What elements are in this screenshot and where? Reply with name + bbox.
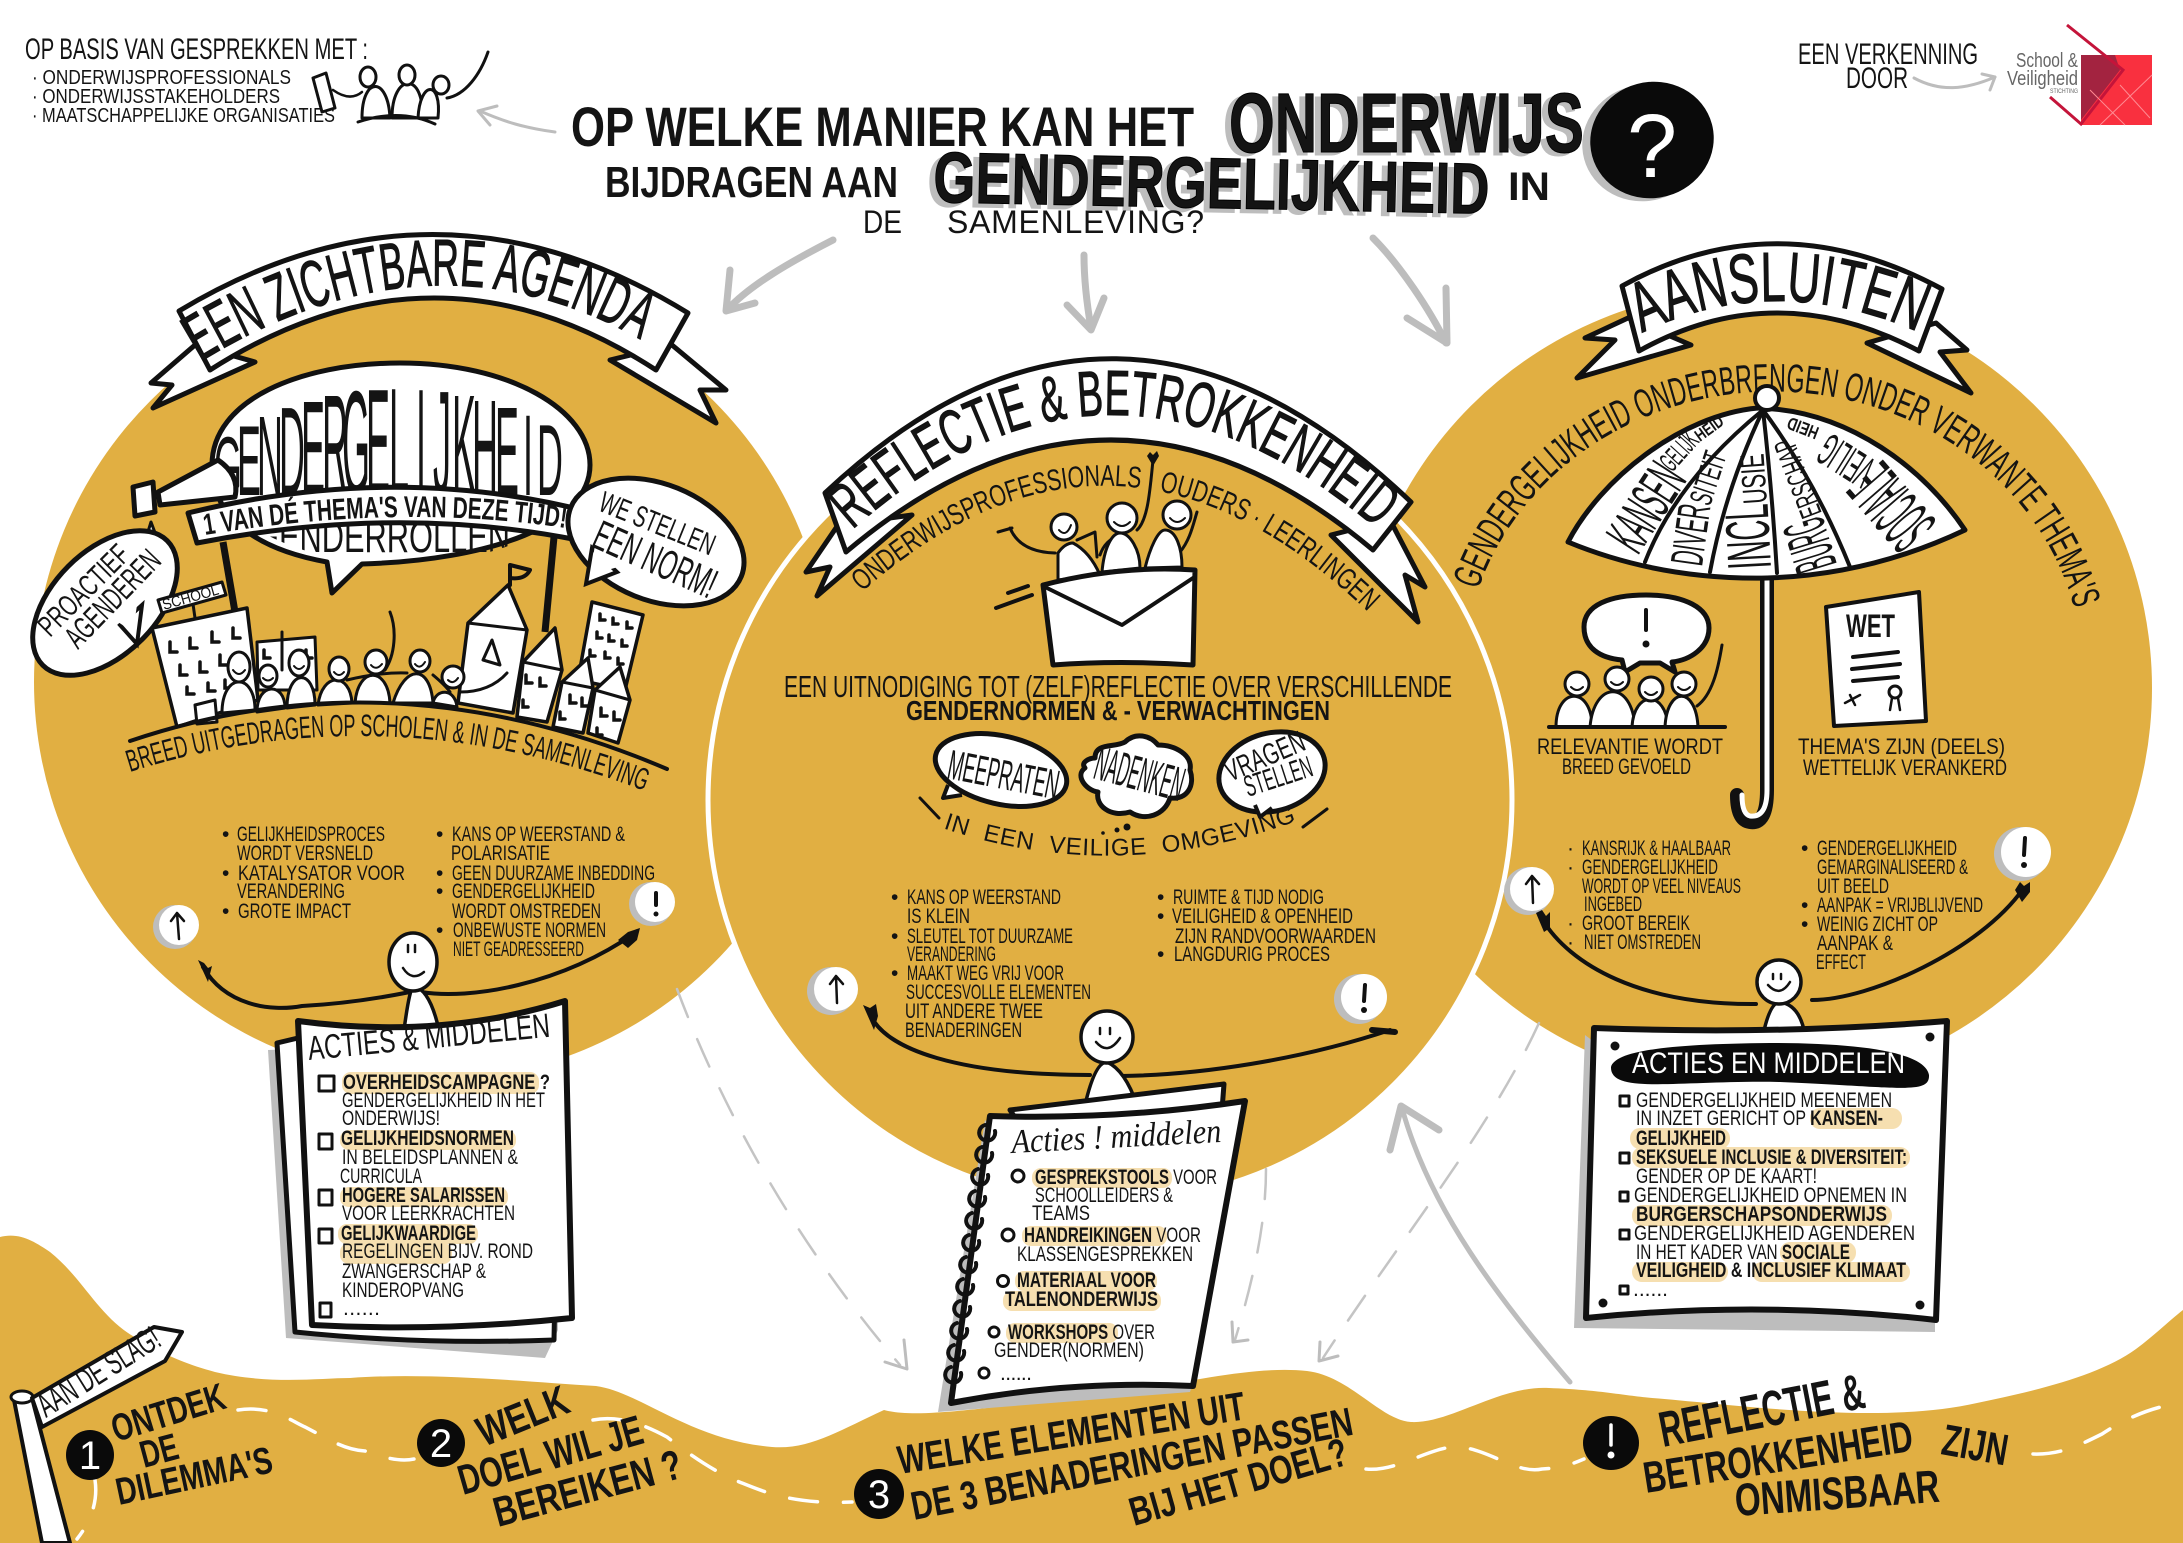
list: pros: • <box>891 886 898 909</box>
icon: umbrella with themes: INCL <box>1713 502 1785 571</box>
icon: up arrow circle <box>807 967 858 1015</box>
icon: question mark blob <box>1569 68 1727 215</box>
icon: up arrow circle <box>1504 867 1554 915</box>
curved heading: verwante thema's: GENDERGELIJKHEID ONDERBRENGEN ONDER VERWANTE THEMA'S <box>1454 364 2100 606</box>
list: cons: GENDERGELIJKHEID <box>452 880 595 903</box>
poster: acties en middelen: IN INZET GERICHT OP KANSEN- <box>1636 1107 1883 1130</box>
list: cons: ZIJN RANDVOORWAARDEN <box>1175 925 1376 948</box>
list: pros: KATALYSATOR VOOR <box>238 862 405 885</box>
figure: stick person holding notebook <box>863 1004 1395 1105</box>
list: pros <box>222 823 405 923</box>
poster: acties en middelen: GENDERGELIJKHEID AGENDEREN <box>1634 1222 1915 1245</box>
speech bubble: gendergelijkheid: I <box>416 359 426 528</box>
speech bubble: meepraten: MEEPRATEN <box>944 741 1063 808</box>
heading: een uitnodiging <box>784 669 1452 726</box>
step 1: ontdek de dilemma's: ONTDEK <box>106 1376 231 1451</box>
step 3: welke elementen: 3 <box>868 1473 890 1517</box>
heading: een uitnodiging: GENDERNORMEN & - VERWACHTINGEN <box>906 695 1330 726</box>
list: pros: GROTE IMPACT <box>238 900 351 923</box>
list: pros: GENDERGELIJKHEID <box>1582 856 1718 879</box>
dashed arrows from circles to the steps <box>677 989 1539 1369</box>
town: school, buildings, church, people <box>130 565 667 769</box>
speech bubble: gendergelijkheid: H <box>472 373 498 525</box>
logo: School & Veiligheid: STICHTING <box>2050 89 2078 95</box>
speech bubble: gendergelijkheid: N <box>257 393 283 519</box>
title: OP WELKE MANIER KAN HET <box>571 95 1194 158</box>
paper: acties en middelen: HOGERE SALARISSEN <box>342 1184 505 1207</box>
title: BIJDRAGEN AAN <box>605 158 898 207</box>
road: dashed white path along the steps <box>77 1403 2183 1539</box>
step 1: ontdek de dilemma's: 1 <box>79 1434 101 1478</box>
list: pros: UIT ANDERE TWEE <box>905 1000 1043 1023</box>
callout: reflectie en betrokkenheid onmisbaar <box>1583 1363 2012 1526</box>
speech bubble: gendergelijkheid: K <box>452 366 476 527</box>
list: cons: • <box>1801 913 1808 936</box>
step 2: welk doel wil je bereiken: 2 <box>430 1422 452 1466</box>
icon: umbrella with themes: ERSCHAP <box>1768 434 1829 522</box>
paper: acties en middelen: GELIJKWAARDIGE <box>341 1222 476 1245</box>
curved caption: breed uitgedragen: BREED UITGEDRAGEN OP SCHOLEN & IN DE SAMENLEVING <box>125 714 649 790</box>
icon: three people on a hill <box>313 52 488 124</box>
panel: reflectie en betrokkenheid contents <box>784 356 1452 1412</box>
icon: umbrella with themes: USIE <box>1734 453 1775 505</box>
poster: acties en middelen: GELIJKHEID <box>1636 1127 1726 1150</box>
cloud: nadenken: NADENKEN <box>1089 737 1190 812</box>
notebook: acties en middelen: GESPREKSTOOLS VOOR <box>1035 1166 1217 1189</box>
notebook: acties en middelen: WORKSHOPS OVER <box>1008 1321 1155 1344</box>
notebook: acties en middelen: MATERIAAL VOOR <box>1017 1269 1156 1292</box>
poster: acties en middelen: BURGERSCHAPSONDERWIJS <box>1636 1203 1887 1226</box>
speech bubble: gendergelijkheid: E <box>237 405 261 516</box>
intro text: op basis van gesprekken: OP BASIS VAN GESPREKKEN MET : <box>25 33 368 66</box>
list: cons: • <box>436 823 443 846</box>
icon: umbrella with themes: KANSEN <box>1594 451 1698 563</box>
list: pros: VERANDERING <box>237 880 345 903</box>
icon: umbrella with themes: HEID <box>1784 413 1821 443</box>
speech bubble: gendergelijkheid: I <box>523 392 533 521</box>
panel: een zichtbare agenda contents <box>10 232 747 1398</box>
step 3: welke elementen: WELKE ELEMENTEN UIT <box>895 1385 1248 1483</box>
list: pros: · <box>1567 912 1574 935</box>
speech bubble: gendergelijkheid: E <box>495 381 519 522</box>
poster: acties en middelen: ...... <box>1633 1278 1668 1301</box>
list: pros: IS KLEIN <box>907 905 970 928</box>
icon: umbrella with themes: DIVER <box>1660 501 1720 568</box>
caption: relevantie: BREED GEVOELD <box>1562 754 1691 779</box>
speech bubble: we stellen een norm: WE STELLEN <box>594 486 720 562</box>
speech bubble: we stellen een norm <box>549 454 763 630</box>
notebook: acties en middelen: GENDER(NORMEN) <box>994 1339 1144 1362</box>
speech bubble: gendergelijkheid: E <box>366 359 390 528</box>
curved caption: doelgroepen: ONDERWIJSPROFESSIONALS · OUDERS · LEERLINGEN <box>852 465 1381 611</box>
speech bubble: gendergelijkheid: D <box>537 406 563 518</box>
paper: acties en middelen: KINDEROPVANG <box>342 1279 464 1302</box>
icon: speech bubble and people <box>1549 595 1725 727</box>
paper: acties en middelen <box>268 1001 572 1358</box>
arrow: title to center <box>1067 255 1104 330</box>
ribbon: een zichtbare agenda: EEN ZICHTBARE AGENDA <box>179 240 652 360</box>
list: pros: WORDT OP VEEL NIVEAUS <box>1582 875 1741 898</box>
curved caption: in een veilige omgeving: IN EEN VEILIGE OMGEVING <box>945 810 1294 856</box>
paper: acties en middelen: OVERHEIDSCAMPAGNE ? <box>343 1071 550 1094</box>
icon: umbrella with themes: BURG <box>1770 510 1849 580</box>
list: cons: LANGDURIG PROCES <box>1174 943 1330 966</box>
speech bubble: gendergelijkheid: D <box>279 381 305 522</box>
paper: acties en middelen: REGELINGEN BIJV. ROND <box>342 1240 533 1263</box>
credit: een verkenning door: DOOR <box>1846 62 1908 95</box>
ribbon: aansluiten: AANSLUITEN <box>1634 252 1932 334</box>
speech bubble: vragen stellen <box>1210 720 1334 824</box>
list: pros: • <box>222 823 229 846</box>
speech bubble: vragen stellen: VRAGEN <box>1220 725 1310 788</box>
list: cons: POLARISATIE <box>451 842 550 865</box>
speech bubble: vragen stellen: STELLEN <box>1240 751 1317 804</box>
step 3: welke elementen: BIJ HET DOEL? <box>1124 1430 1353 1535</box>
step 3: welke elementen: DE 3 BENADERINGEN PASSEN <box>907 1400 1356 1529</box>
panel: center circle <box>708 398 1512 1202</box>
ribbon: een zichtbare agenda <box>148 232 728 426</box>
list: pros: · <box>1567 931 1574 954</box>
paper: acties en middelen: GENDERGELIJKHEID IN HET <box>342 1089 545 1112</box>
speech bubble: gendergelijkheid: G <box>342 362 370 528</box>
speech bubble: gendergelijkheid: E <box>301 372 325 524</box>
notebook: acties en middelen: SCHOOLLEIDERS & <box>1035 1184 1173 1207</box>
icon: exclamation circle <box>1994 827 2051 881</box>
arrow: reflection back to center <box>1390 1106 1570 1382</box>
step 2: welk doel wil je bereiken: WELK <box>470 1376 575 1455</box>
list: cons: • <box>1801 894 1808 917</box>
step 2: welk doel wil je bereiken: DOEL WIL JE <box>453 1406 648 1504</box>
figure: stick person holding paper <box>198 928 640 1030</box>
speech bubble: gendergelijkheid: G <box>214 420 242 513</box>
paper: acties en middelen: VOOR LEERKRACHTEN <box>342 1202 515 1225</box>
icon: exclamation circle <box>629 882 675 926</box>
paper: acties en middelen: GELIJKHEIDSNORMEN <box>341 1127 514 1150</box>
step 1: ontdek de dilemma's: DILEMMA'S <box>112 1440 276 1514</box>
ribbon: aansluiten <box>1574 241 1974 396</box>
signpost: aan de slag: AAN DE SLAG! <box>30 1319 167 1425</box>
intro text: op basis van gesprekken: · ONDERWIJSPROFESSIONALS <box>32 67 291 89</box>
title: ONDERWIJS <box>1223 79 1578 173</box>
paper: acties en middelen: CURRICULA <box>340 1165 422 1188</box>
list: pros: • <box>891 962 898 985</box>
list: pros: • <box>891 925 898 948</box>
list: pros: • <box>222 900 229 923</box>
icon: law document: WET <box>1846 608 1895 644</box>
icon: umbrella with themes: VEILIG <box>1808 424 1883 498</box>
list: cons: EFFECT <box>1816 951 1866 974</box>
arrow: title to right <box>1373 238 1447 343</box>
list: pros: VERANDERING <box>907 943 996 966</box>
title: SAMENLEVING? <box>947 204 1204 240</box>
list: cons: ONBEWUSTE NORMEN <box>453 919 606 942</box>
list: cons: • <box>436 919 443 942</box>
speech bubble: gendergelijkheid: GENDERROLLEN <box>255 513 510 562</box>
list: pros: GELIJKHEIDSPROCES <box>237 823 385 846</box>
speech bubble: proactief agenderen <box>6 504 204 702</box>
notebook: acties en middelen: TEAMS <box>1032 1202 1090 1225</box>
list: pros <box>891 886 1091 1042</box>
heading: een uitnodiging: EEN UITNODIGING TOT (ZELF)REFLECTIE OVER VERSCHILLENDE <box>784 669 1452 704</box>
ribbon: reflectie en betrokkenheid: REFLECTIE & BETROKKENHEID <box>828 370 1398 528</box>
list: pros: • <box>222 862 229 885</box>
title: DE <box>863 204 902 240</box>
arrow: title to left <box>726 240 833 311</box>
list: cons: NIET GEADRESSEERD <box>453 938 584 961</box>
poster: acties en middelen: GENDERGELIJKHEID OPNEMEN IN <box>1634 1184 1907 1207</box>
icon: umbrella with themes: GELIJK <box>1653 425 1705 477</box>
speech bubble: meepraten <box>928 722 1074 818</box>
signpost: aan de slag <box>11 1319 182 1543</box>
panel: right circle <box>1354 289 2152 1087</box>
logo: School & Veiligheid: School & <box>2016 50 2079 72</box>
step 1: ontdek de dilemma's <box>66 1376 276 1514</box>
list: cons: • <box>1801 837 1808 860</box>
list: cons: GEEN DUURZAME INBEDDING <box>452 862 655 885</box>
poster: acties en middelen <box>1574 1021 1947 1332</box>
callout: reflectie en betrokkenheid onmisbaar: ONMISBAAR <box>1733 1460 1941 1526</box>
paper: acties en middelen: ONDERWIJS! <box>342 1107 440 1130</box>
caption: thema's wettelijk <box>1798 734 2007 780</box>
poster: acties en middelen: GENDER OP DE KAART! <box>1636 1165 1817 1188</box>
icon: umbrella with themes: SOCIALE <box>1834 448 1950 565</box>
icon: megaphone <box>133 460 236 548</box>
list: cons: GENDERGELIJKHEID <box>1817 837 1957 860</box>
caption: relevantie: RELEVANTIE WORDT <box>1537 734 1723 759</box>
notebook: acties en middelen: KLASSENGESPREKKEN <box>1017 1243 1193 1266</box>
list: cons: KANS OP WEERSTAND & <box>452 823 625 846</box>
list: pros: WORDT VERSNELD <box>237 842 373 865</box>
town: school, buildings, church, people: SCHOOL <box>160 582 221 614</box>
speech bubble: gendergelijkheid: J <box>433 362 451 528</box>
intro text: op basis van gesprekken: · MAATSCHAPPELIJKE ORGANISATIES <box>32 105 335 127</box>
list: cons: • <box>1157 886 1164 909</box>
poster: acties en middelen: IN HET KADER VAN SOCIALE <box>1636 1241 1850 1264</box>
callout: reflectie en betrokkenheid onmisbaar: REFLECTIE & <box>1654 1363 1869 1458</box>
poster: acties en middelen: ACTIES EN MIDDELEN <box>1632 1047 1905 1080</box>
list: pros: KANSRIJK & HAALBAAR <box>1582 837 1731 860</box>
arrow: to intro text <box>478 106 555 132</box>
list: cons: • <box>1157 905 1164 928</box>
icon: umbrella with themes: SITEIT <box>1682 447 1733 509</box>
list: cons <box>1157 886 1376 966</box>
list: pros: GROOT BEREIK <box>1582 912 1690 935</box>
notebook: acties en middelen <box>938 1084 1245 1412</box>
list: pros <box>1567 837 1741 954</box>
list: cons: VEILIGHEID & OPENHEID <box>1172 905 1353 928</box>
list: cons: • <box>436 880 443 903</box>
callout: reflectie en betrokkenheid onmisbaar: ZIJN <box>1938 1416 2012 1475</box>
notebook: acties en middelen: HANDREIKINGEN VOOR <box>1024 1224 1201 1247</box>
speech bubble: proactief agenderen: AGENDEREN <box>57 542 168 655</box>
paper: acties en middelen: ZWANGERSCHAP & <box>342 1260 486 1283</box>
banner: 1 van dé thema's: 1 VAN DÉ THEMA'S VAN DEZE TIJD! <box>204 496 566 535</box>
list: cons: AANPAK = VRIJBLIJVEND <box>1817 894 1983 917</box>
icon: question mark blob: ? <box>1627 97 1677 197</box>
title: GENDERGELIJKHEID <box>933 138 1490 230</box>
title: ONDERWIJS <box>1229 76 1584 170</box>
icon: umbrella with themes <box>1568 386 1965 822</box>
icon: people in envelope <box>996 451 1197 665</box>
list: cons: • <box>1157 943 1164 966</box>
logo: School & Veiligheid <box>2007 25 2152 125</box>
list: pros: · <box>1567 856 1574 879</box>
title: IN <box>1508 165 1550 209</box>
title: GENDERGELIJKHEID <box>927 142 1484 234</box>
credit: een verkenning door: EEN VERKENNING <box>1798 38 1978 71</box>
list: pros: INGEBED <box>1584 893 1642 916</box>
list: cons: AANPAK & <box>1817 932 1893 955</box>
step 2: welk doel wil je bereiken: BEREIKEN ? <box>488 1440 687 1536</box>
speech bubble: gendergelijkheid <box>212 356 590 593</box>
background: golden landscape band <box>0 1236 2183 1543</box>
caption: thema's wettelijk: THEMA'S ZIJN (DEELS) <box>1798 734 2005 759</box>
figure: stick person holding poster <box>1536 882 2030 1035</box>
caption: thema's wettelijk: WETTELIJK VERANKERD <box>1803 755 2007 780</box>
list: pros: SLEUTEL TOT DUURZAME <box>907 925 1073 948</box>
list: cons: UIT BEELD <box>1817 875 1889 898</box>
credit: een verkenning door <box>1798 38 1995 95</box>
icon: exclamation circle <box>1334 974 1387 1024</box>
caption: relevantie <box>1537 734 1723 779</box>
notebook: acties en middelen: TALENONDERWIJS <box>1005 1288 1158 1311</box>
list: pros: MAAKT WEG VRIJ VOOR <box>907 962 1064 985</box>
poster: acties en middelen: SEKSUELE INCLUSIE & DIVERSITEIT: <box>1636 1146 1907 1169</box>
list: pros: NIET OMSTREDEN <box>1584 931 1701 954</box>
speech bubble: proactief agenderen: PROACTIEF <box>32 538 136 643</box>
icon: umbrella with themes: HEID <box>1691 412 1727 445</box>
poles <box>223 537 554 632</box>
callout: reflectie en betrokkenheid onmisbaar: BETROKKENHEID <box>1640 1412 1916 1503</box>
step 3: welke elementen <box>854 1385 1356 1535</box>
logo: School & Veiligheid: Veiligheid <box>2007 68 2078 90</box>
speech bubble: gendergelijkheid: L <box>389 356 409 528</box>
list: cons: RUIMTE & TIJD NODIG <box>1173 886 1324 909</box>
list: pros: SUCCESVOLLE ELEMENTEN <box>906 981 1091 1004</box>
speech bubble: gendergelijkheid: R <box>322 366 348 527</box>
poster: acties en middelen: VEILIGHEID & INCLUSIEF KLIMAAT <box>1636 1259 1906 1282</box>
title <box>571 76 1584 240</box>
paper: acties en middelen: ACTIES & MIDDELEN <box>306 1007 552 1068</box>
icon: law document <box>1826 592 1926 726</box>
notebook: acties en middelen: ...... <box>1000 1362 1032 1385</box>
panel: left circle <box>34 284 830 1080</box>
list: cons <box>1801 837 1983 974</box>
list: cons: GEMARGINALISEERD & <box>1817 856 1968 879</box>
list: pros: · <box>1567 837 1574 860</box>
intro text: op basis van gesprekken: · ONDERWIJSSTAKEHOLDERS <box>32 86 280 108</box>
step 1: ontdek de dilemma's: DE <box>135 1426 183 1477</box>
paper: acties en middelen: IN BELEIDSPLANNEN & <box>342 1146 518 1169</box>
notebook: acties en middelen: Acties ! middelen <box>1009 1113 1222 1161</box>
icon: up arrow circle <box>153 905 199 949</box>
cloud: nadenken <box>1081 736 1192 835</box>
list: cons: WORDT OMSTREDEN <box>452 900 601 923</box>
list: pros: KANS OP WEERSTAND <box>907 886 1061 909</box>
list: cons <box>436 823 655 961</box>
panel: aansluiten contents <box>1454 241 2100 1332</box>
list: pros: BENADERINGEN <box>905 1019 1022 1042</box>
list: cons: • <box>436 862 443 885</box>
speech bubble: we stellen een norm: EEN NORM! <box>586 511 724 607</box>
paper: acties en middelen: ...... <box>343 1297 380 1320</box>
intro text: op basis van gesprekken <box>25 33 368 127</box>
poster: acties en middelen: GENDERGELIJKHEID MEENEMEN <box>1636 1089 1892 1112</box>
list: cons: WEINIG ZICHT OP <box>1817 913 1938 936</box>
step 2: welk doel wil je bereiken <box>417 1376 687 1536</box>
